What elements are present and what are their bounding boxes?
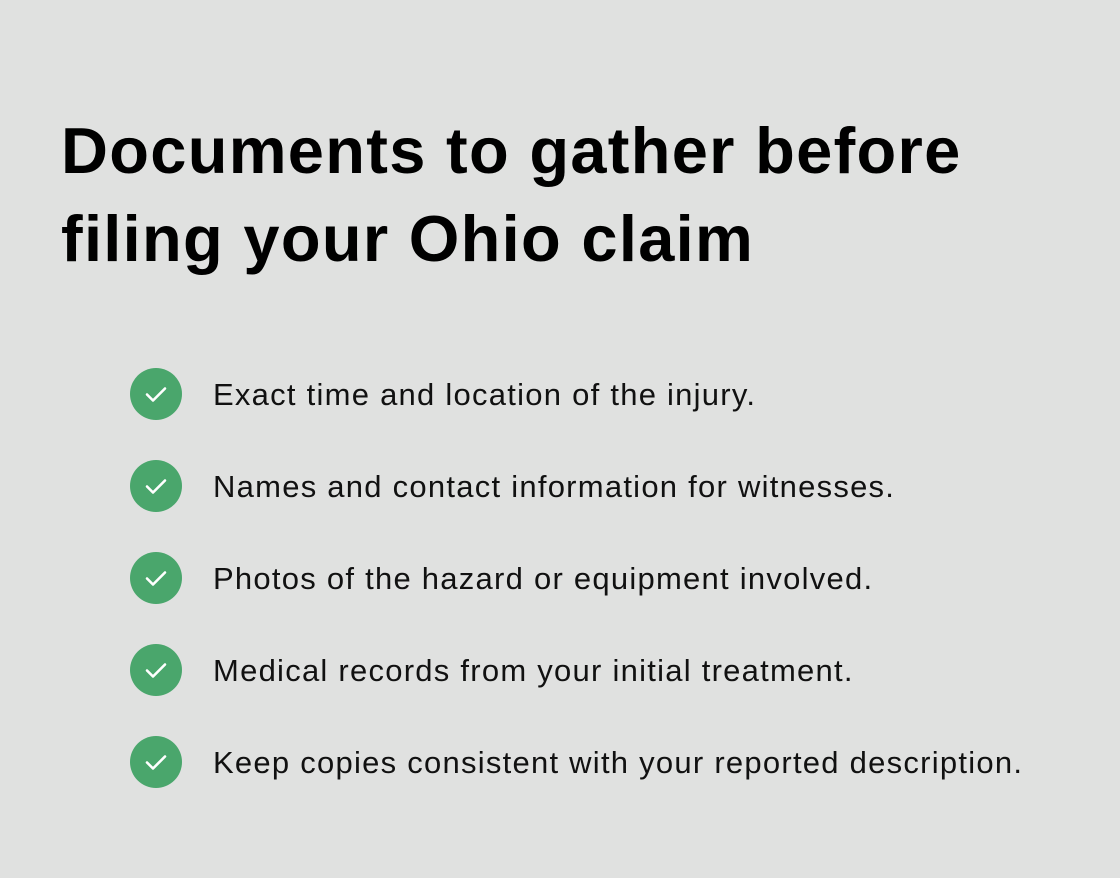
item 3 [130, 552, 873, 604]
item 1: Exact time and location of the injury. [213, 377, 756, 412]
item 5: Keep copies consistent with your reported description. [213, 745, 1023, 780]
item 1 [130, 368, 756, 420]
item 4: Medical records from your initial treatment. [213, 653, 854, 688]
title: Documents to gather before [61, 114, 962, 187]
item 3: Photos of the hazard or equipment involved. [213, 561, 873, 596]
checklist [130, 368, 1023, 788]
item 2 [130, 460, 895, 512]
title [61, 114, 962, 275]
item 5 [130, 736, 1023, 788]
item 4 [130, 644, 854, 696]
title: filing your Ohio claim [61, 202, 754, 275]
item 2: Names and contact information for witnesses. [213, 469, 895, 504]
